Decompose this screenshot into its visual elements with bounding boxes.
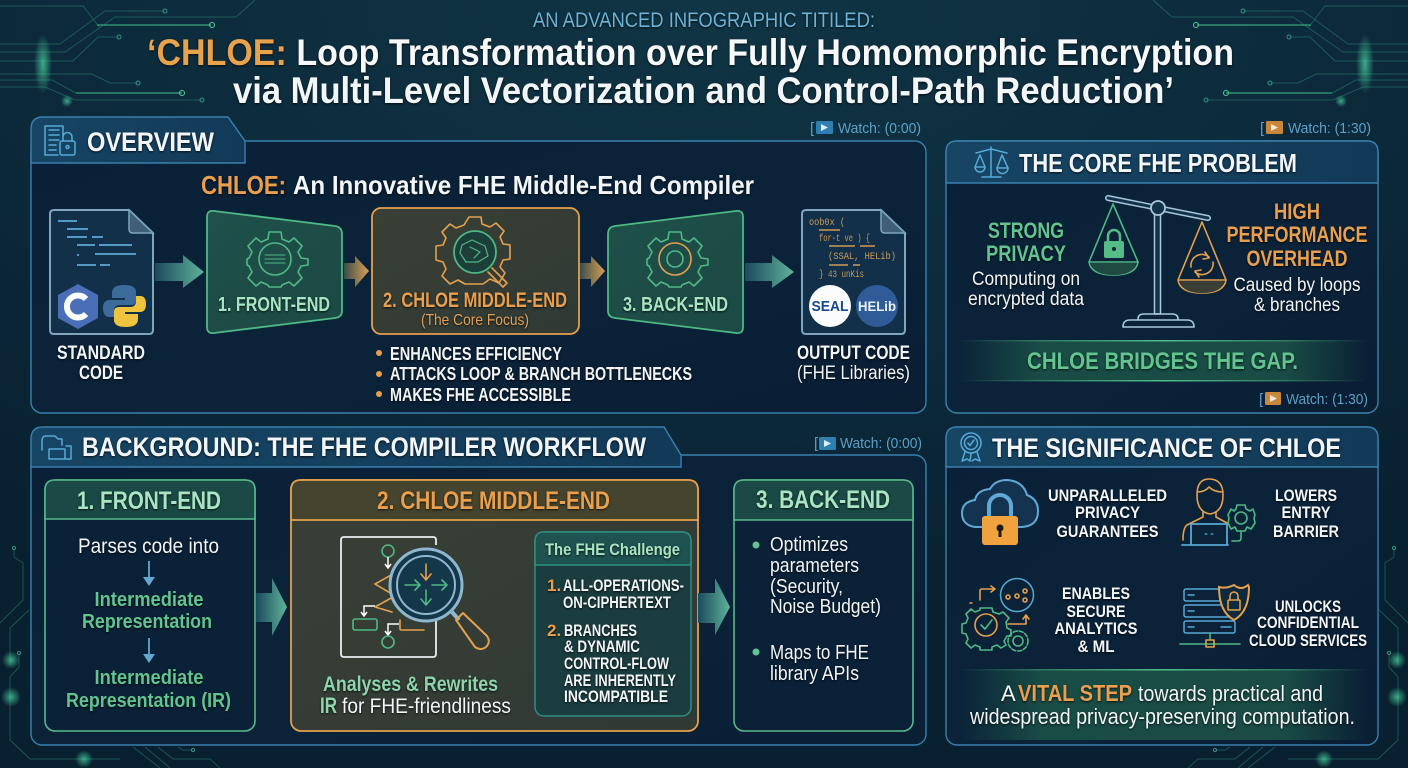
bridge callout <box>958 340 1368 382</box>
icon: balance scale <box>975 147 1008 177</box>
front-end box: Parses code into <box>78 535 219 558</box>
FHE challenge card: 1. <box>547 576 561 595</box>
item: privacy guarantees: GUARANTEES <box>1056 522 1158 541</box>
arrow: front-end to middle-end <box>344 256 369 287</box>
overview heading tab <box>31 117 245 163</box>
high overhead text: Caused by loops <box>1234 275 1360 296</box>
icon: C++ logo <box>58 284 98 329</box>
right pan with cycle arrows <box>1178 222 1226 293</box>
FHE challenge card: ARE INHERENTLY <box>564 671 677 690</box>
vital step callout: widespread privacy-preserving computation. <box>969 704 1355 729</box>
item: secure analytics: SECURE <box>1066 602 1126 621</box>
core problem header: THE CORE FHE PROBLEM <box>1019 148 1297 178</box>
front-end box: Intermediate <box>94 667 204 689</box>
arrow: middle-end to back-end <box>580 256 605 287</box>
back-end stage: 3. BACK-END <box>623 294 728 316</box>
front-end stage <box>207 211 342 333</box>
middle-end caption: for FHE-friendliness <box>342 695 511 718</box>
front-end box: 1. FRONT-END <box>77 487 221 515</box>
SEAL badge: SEAL <box>812 298 848 315</box>
panel: overview <box>31 117 926 413</box>
panel: significance of CHLOE <box>946 427 1378 745</box>
vital step callout: A <box>1001 681 1016 706</box>
bridge callout: CHLOE BRIDGES THE GAP. <box>1027 348 1298 375</box>
FHE challenge card: BRANCHES <box>564 621 637 640</box>
standard code label: STANDARD <box>57 343 145 364</box>
middle-end stage: (The Core Focus) <box>421 312 529 329</box>
overview title: OVERVIEW <box>87 127 214 157</box>
watch tag: background: Watch: (0:00) <box>840 435 922 452</box>
icon: python logo <box>103 285 146 327</box>
middle-end caption: Analyses & Rewrites <box>323 673 498 696</box>
item: secure analytics: ANALYTICS <box>1054 619 1138 638</box>
middle-end caption: IR <box>320 693 337 718</box>
high overhead text: PERFORMANCE <box>1226 222 1368 247</box>
back-end stage <box>608 211 743 333</box>
item: confidential cloud: UNLOCKS <box>1275 597 1341 616</box>
output code document <box>802 210 905 334</box>
front-end box: Representation <box>82 611 212 633</box>
output code label: (FHE Libraries) <box>797 363 910 384</box>
back-end box: Maps to FHE <box>770 642 869 664</box>
icon: cloud with lock <box>962 480 1038 545</box>
middle-end stage: 2. CHLOE MIDDLE-END <box>383 289 567 312</box>
icon: person at laptop with gear <box>1182 479 1255 545</box>
item: confidential cloud <box>1180 585 1367 650</box>
back-end box: Noise Budget) <box>770 596 881 618</box>
strong privacy text: Computing on <box>972 269 1080 290</box>
watch tag: core problem top: [ <box>1260 120 1265 137</box>
item: secure analytics: & ML <box>1078 637 1114 656</box>
front-end box <box>45 480 255 731</box>
middle-end caption <box>320 673 511 718</box>
icon: folders <box>42 436 71 459</box>
output code label <box>797 343 910 384</box>
item: privacy guarantees: PRIVACY <box>1075 503 1141 522</box>
high overhead text: & branches <box>1254 295 1340 316</box>
vital step callout: VITAL STEP <box>1018 680 1132 706</box>
output code document: (SSAL, HELib) <box>828 251 896 263</box>
background heading tab <box>31 427 681 467</box>
back-end box: Optimizes <box>770 534 848 556</box>
high overhead text <box>1226 199 1368 316</box>
arrow down <box>148 561 150 577</box>
strong privacy text: encrypted data <box>968 289 1084 310</box>
middle-end benefits list: MAKES FHE ACCESSIBLE <box>390 385 571 405</box>
FHE challenge card: CONTROL-FLOW <box>564 654 670 673</box>
back-end box <box>734 480 913 731</box>
significance header <box>946 427 1378 467</box>
item: secure analytics: ENABLES <box>1062 584 1130 603</box>
output code document: for-t ve ) { <box>819 233 870 245</box>
item: privacy guarantees: UNPARALLELED <box>1048 486 1167 505</box>
back-end box: 3. BACK-END <box>756 486 890 514</box>
FHE challenge card: The FHE Challenge <box>545 540 680 559</box>
item: lowers entry barrier: BARRIER <box>1273 522 1339 541</box>
output code label: OUTPUT CODE <box>797 343 910 364</box>
middle-end box: 2. CHLOE MIDDLE-END <box>377 487 610 515</box>
vital step callout: towards practical and <box>1138 681 1323 706</box>
balance scale illustration <box>1089 198 1226 327</box>
watch tag: overview: Watch: (0:00) <box>838 120 921 137</box>
middle-end benefits list: ATTACKS LOOP & BRANCH BOTTLENECKS <box>390 364 692 384</box>
arrow: front-end to middle-end <box>256 578 287 636</box>
front-end box: Representation (IR) <box>66 690 231 712</box>
flowchart with magnifier illustration <box>341 537 489 657</box>
magnifier <box>390 549 489 649</box>
overview subtitle: An Innovative FHE Middle-End Compiler <box>293 170 754 200</box>
strong privacy text <box>968 218 1084 310</box>
back-end box: parameters <box>770 555 859 577</box>
item: privacy guarantees <box>962 480 1167 545</box>
middle-end box <box>291 480 698 731</box>
high overhead text: HIGH <box>1274 199 1320 224</box>
back-end box: library APIs <box>770 663 859 685</box>
middle-end stage <box>372 208 579 334</box>
output code document: oob0x ( <box>809 217 845 229</box>
arrow down <box>148 638 150 654</box>
left pan with lock <box>1089 204 1138 275</box>
FHE challenge card: ALL-OPERATIONS- <box>563 576 684 595</box>
FHE challenge card: INCOMPATIBLE <box>564 687 668 706</box>
arrow: back-end to output <box>745 255 794 288</box>
title line 1: ‘CHLOE: Loop Transformation over Fully Homomorphic Encryption <box>147 32 1234 73</box>
FHE challenge card: ON-CIPHERTEXT <box>563 593 671 612</box>
item: lowers entry barrier: LOWERS <box>1275 486 1337 505</box>
watch tag: core problem top: Watch: (1:30) <box>1288 120 1371 137</box>
standard code document <box>50 210 153 334</box>
output code document: } 43 unKis <box>819 269 864 281</box>
item: secure analytics <box>962 578 1138 656</box>
watch tag: background: [ <box>814 435 819 452</box>
item: confidential cloud: CLOUD SERVICES <box>1249 631 1367 650</box>
icon: analytics gears <box>962 578 1034 651</box>
item: lowers entry barrier <box>1182 479 1339 545</box>
front-end stage: 1. FRONT-END <box>218 294 330 316</box>
overview subtitle: CHLOE: <box>201 170 286 200</box>
FHE challenge card: & DYNAMIC <box>564 637 640 656</box>
icon: document with lock <box>45 126 75 155</box>
title line 2: via Multi-Level Vectorization and Control-Path Reduction’ <box>233 70 1174 111</box>
front-end box: Intermediate <box>94 589 204 611</box>
arrow: code to front-end <box>155 255 204 288</box>
middle-end benefits list <box>376 344 692 405</box>
kicker: AN ADVANCED INFOGRAPHIC TITILED: <box>533 9 875 32</box>
strong privacy text: PRIVACY <box>986 241 1066 266</box>
standard code label <box>57 343 145 384</box>
item: lowers entry barrier: ENTRY <box>1282 503 1331 522</box>
background heading tab: BACKGROUND: THE FHE COMPILER WORKFLOW <box>82 432 646 462</box>
FHE challenge card: 2. <box>547 621 561 640</box>
strong privacy text: STRONG <box>988 218 1064 243</box>
high overhead text: OVERHEAD <box>1246 246 1348 271</box>
panel: core FHE problem <box>946 141 1378 413</box>
panel: background workflow <box>31 427 926 745</box>
watch tag: overview: [ <box>810 120 815 137</box>
title block <box>147 9 1234 111</box>
arrow: middle-end to back-end <box>698 578 730 635</box>
significance header: THE SIGNIFICANCE OF CHLOE <box>992 433 1341 463</box>
FHE challenge card <box>535 532 691 716</box>
watch tag: core problem bottom: Watch: (1:30) <box>1286 391 1368 408</box>
middle-end benefits list: ENHANCES EFFICIENCY <box>390 344 562 364</box>
icon: server with shield <box>1180 585 1249 647</box>
core problem header <box>946 141 1378 183</box>
icon: gear <box>247 232 308 287</box>
icon: gear <box>647 232 708 287</box>
icon: gear with magnifier <box>436 217 510 287</box>
item: confidential cloud: CONFIDENTIAL <box>1257 613 1359 632</box>
vital step callout <box>960 669 1368 740</box>
standard code label: CODE <box>79 363 123 384</box>
back-end box: (Security, <box>770 576 843 598</box>
watch tag: core problem bottom: [ <box>1259 391 1264 408</box>
HElib badge: HELib <box>858 298 896 314</box>
icon: ribbon medal <box>961 433 981 461</box>
